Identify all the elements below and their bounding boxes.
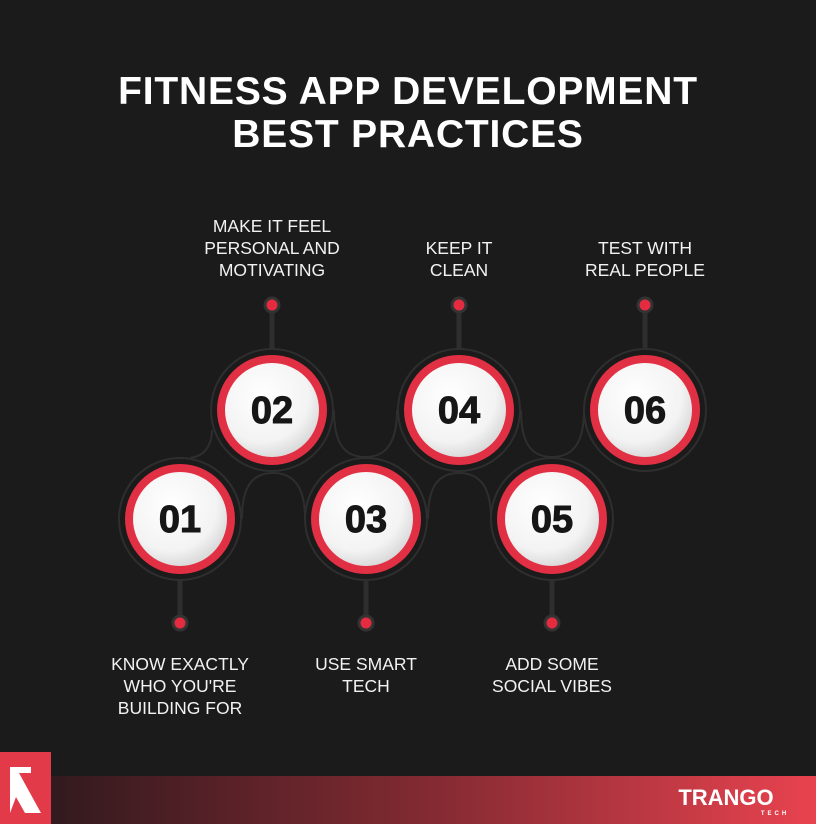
title: BEST PRACTICES [232,113,584,156]
label 05: ADD SOME [505,654,599,674]
footer band [51,776,816,824]
label 06: REAL PEOPLE [585,260,705,280]
label 01 [111,654,249,718]
label 02: MAKE IT FEEL [213,216,331,236]
label 06 [585,238,705,280]
label 05 [492,654,612,696]
circles: 02 [251,390,293,432]
label 03: TECH [342,676,390,696]
title: FITNESS APP DEVELOPMENT [118,70,698,113]
label 03 [315,654,417,696]
label 03: USE SMART [315,654,417,674]
circles: 01 [159,499,201,541]
logo square [0,752,51,824]
circles [125,355,700,574]
label 04: KEEP IT [426,238,492,258]
label 02: PERSONAL AND [204,238,340,258]
label 06: TEST WITH [598,238,692,258]
label 02 [204,216,340,280]
title [118,70,698,156]
label 05: SOCIAL VIBES [492,676,612,696]
label 02: MOTIVATING [219,260,325,280]
label 01: BUILDING FOR [118,698,242,718]
label 01: KNOW EXACTLY [111,654,249,674]
circles: 04 [438,390,480,432]
label 04 [426,238,492,280]
diagram: TECH [761,811,789,817]
circles: 05 [531,499,573,541]
circles: 03 [345,499,387,541]
brand: TRANGO [678,785,774,810]
circles: 06 [624,390,666,432]
label 01: WHO YOU'RE [124,676,236,696]
label 04: CLEAN [430,260,488,280]
